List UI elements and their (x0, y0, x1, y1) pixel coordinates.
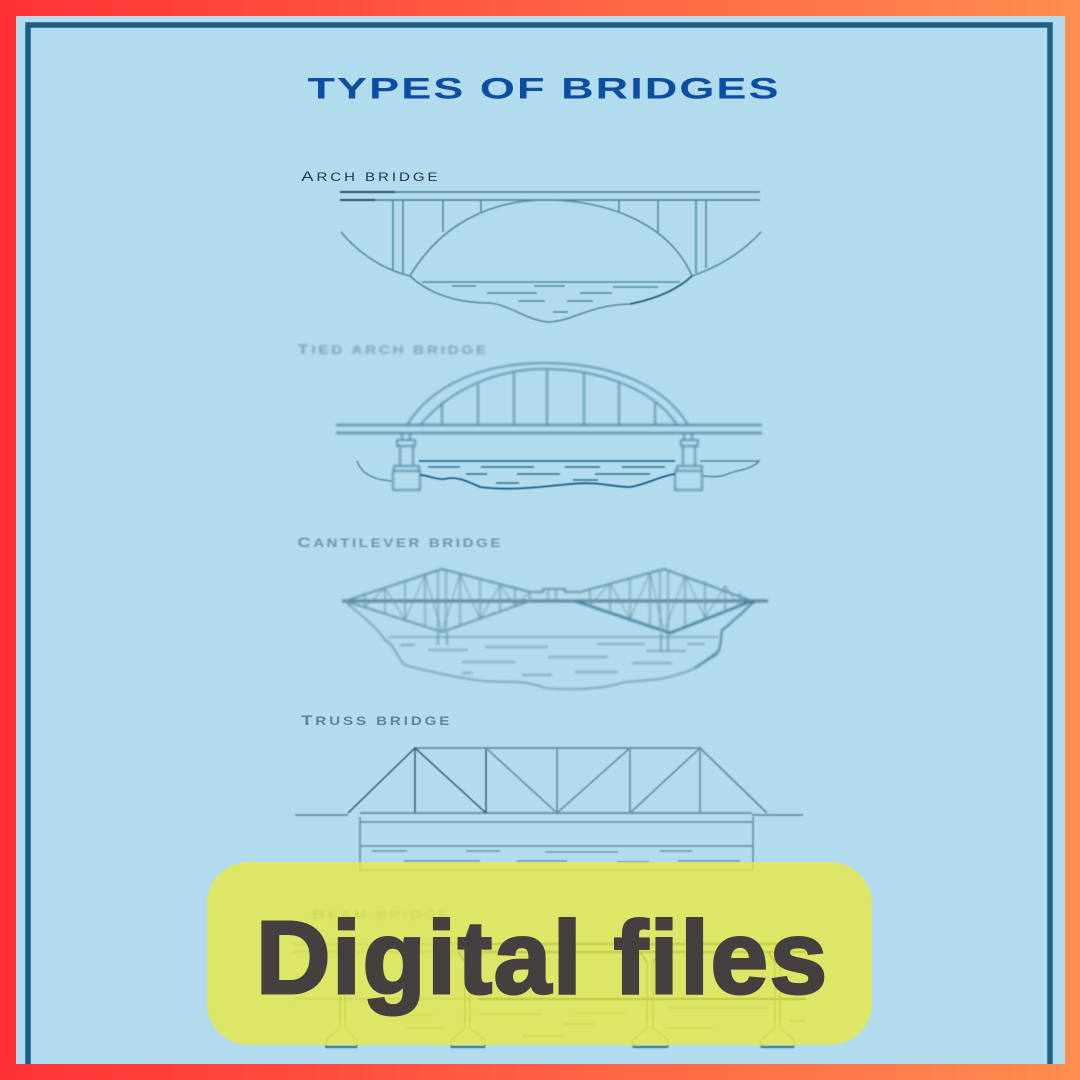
drawing: beam bridge (325, 944, 806, 1047)
title: TYPES OF BRIDGES (307, 72, 778, 106)
river: tied arch bridge (357, 461, 759, 489)
label: truss bridge: T RUSS BRIDGE (301, 713, 449, 728)
panel: tied arch bridge (297, 342, 762, 490)
panel: cantilever bridge (297, 535, 768, 689)
panel: arch bridge (301, 169, 761, 322)
drawing: tied arch bridge (336, 363, 762, 490)
drawing: cantilever bridge (342, 569, 768, 689)
drawing: arch bridge (340, 192, 761, 322)
panel: beam bridge (behind badge) (293, 907, 806, 1047)
badge text: Digital files (256, 900, 827, 1015)
label: arch bridge: A RCH BRIDGE (301, 169, 438, 184)
label: tied arch bridge: TIED ARCH BRIDGE (297, 342, 486, 357)
label: beam bridge: BEAM BRIDGE (312, 907, 448, 922)
badge background (207, 862, 872, 1045)
drawing: beam bridge left faded part (293, 944, 477, 999)
badge: digital files (207, 862, 872, 1045)
panel: truss bridge (295, 713, 803, 870)
label: cantilever bridge: CANTILEVER BRIDGE (297, 535, 500, 550)
drawing: truss bridge (295, 748, 803, 870)
